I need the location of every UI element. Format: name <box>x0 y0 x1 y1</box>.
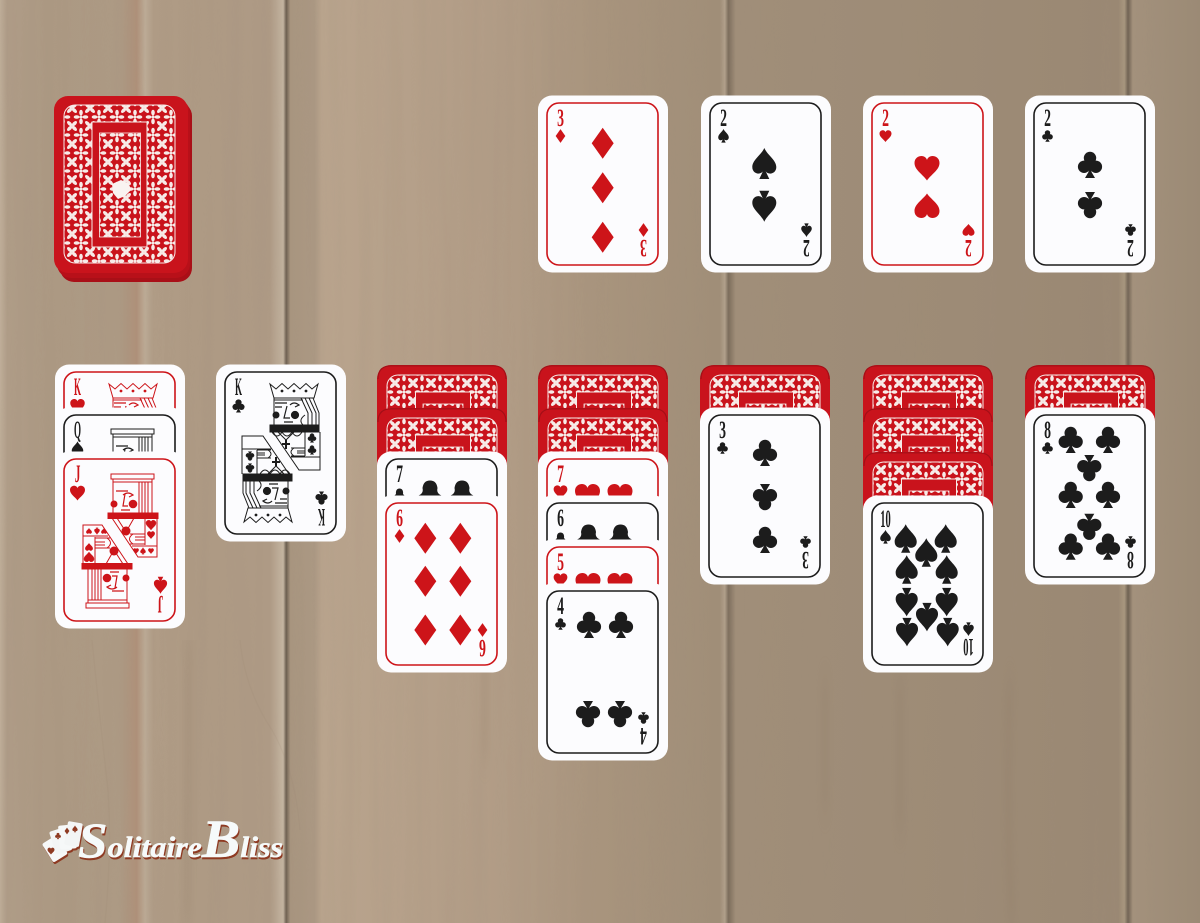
foundation: 2 of hearts <box>863 96 993 272</box>
face-down cards <box>538 365 668 585</box>
card: 4 of clubs: 4 <box>640 722 647 749</box>
card: queen of spades: Q <box>74 417 81 445</box>
foundation: 3 of diamonds: 3 <box>640 234 647 261</box>
card: 10 of spades: 10 <box>963 632 974 660</box>
face-down card <box>700 365 830 542</box>
card: 6 of spades: 6 <box>557 505 564 532</box>
card: 10 of spades <box>863 496 993 672</box>
foundation: 2 of clubs: 2 <box>1044 105 1051 132</box>
tableau column 1 <box>55 364 185 628</box>
card: 3 of clubs: 3 <box>719 417 726 444</box>
tableau column 4 <box>538 365 668 760</box>
card: 7 of spades: 7 <box>396 461 403 488</box>
card: 3 of clubs: 3 <box>802 546 809 573</box>
card: 4 of clubs <box>538 584 668 760</box>
card: king of hearts <box>55 364 185 542</box>
logo wordmark: SolitaireBliss <box>78 809 283 869</box>
card: 6 of diamonds: 6 <box>396 505 403 532</box>
card: 8 of clubs: 8 <box>1044 417 1051 444</box>
foundation: 2 of hearts: 2 <box>965 234 972 261</box>
foundation: 2 of spades: 2 <box>803 234 810 261</box>
foundation: 2 of spades: 2 <box>720 105 727 132</box>
card: 8 of clubs: 8 <box>1127 546 1134 573</box>
card: queen of spades <box>55 408 185 584</box>
tableau column 6 <box>863 365 993 672</box>
card: 6 of spades <box>538 496 668 672</box>
card: 7 of spades <box>377 452 507 628</box>
face-down card <box>1025 365 1155 542</box>
icon: fan of cards <box>42 821 83 863</box>
foundation: 2 of spades <box>701 96 831 272</box>
card: 5 of hearts <box>538 540 668 716</box>
card: 5 of hearts: 5 <box>557 549 564 576</box>
stock pile <box>54 96 192 282</box>
foundation: 3 of diamonds: 3 <box>557 105 564 132</box>
face-down cards <box>863 365 993 629</box>
card: king of hearts: K <box>74 374 81 402</box>
card: 6 of diamonds: 6 <box>479 634 486 661</box>
tableau column 7 <box>1025 365 1155 584</box>
card: 8 of clubs <box>1025 408 1155 584</box>
card: 6 of diamonds <box>377 496 507 672</box>
card: 3 of clubs <box>700 408 830 584</box>
foundation: 2 of clubs: 2 <box>1127 234 1134 261</box>
foundation: 2 of clubs <box>1025 96 1155 272</box>
card: 7 of hearts <box>538 452 668 628</box>
tableau column 3 <box>377 365 507 672</box>
foundation: 3 of diamonds <box>538 96 668 272</box>
card: 7 of hearts: 7 <box>557 461 564 488</box>
tableau column 2: king of clubs: K <box>235 374 242 402</box>
logo: Solitaire Bliss <box>42 809 283 869</box>
card: jack of hearts <box>55 452 185 628</box>
card: 10 of spades: 10 <box>880 506 891 534</box>
tableau column 5 <box>700 365 830 584</box>
face-down cards <box>377 365 507 585</box>
card: jack of hearts: J <box>75 461 80 488</box>
card: jack of hearts: J <box>158 590 163 617</box>
card: 4 of clubs: 4 <box>557 593 564 620</box>
foundation: 2 of hearts: 2 <box>882 105 889 132</box>
tableau column 2: king of clubs <box>216 364 346 542</box>
tableau column 2: king of clubs: K <box>318 502 325 530</box>
